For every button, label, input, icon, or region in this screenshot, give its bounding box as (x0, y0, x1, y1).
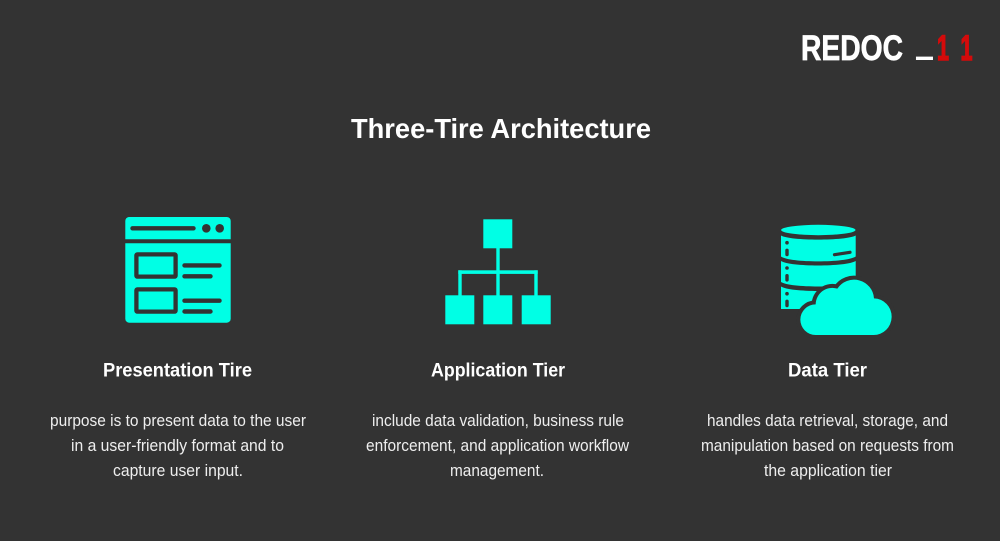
text block: presentation description: in a user-friendly format and to (71, 436, 284, 455)
panel: data tier (701, 225, 954, 480)
text block: application description: enforcement, and application workflow (366, 436, 630, 455)
text block: data description: the application tier (764, 461, 892, 480)
logo: REDOC _11: 1 (937, 28, 949, 68)
title: Three-Tire Architecture (351, 113, 651, 144)
logo: REDOC _11: _ (916, 22, 933, 62)
heading: application tier: Application Tier (431, 360, 565, 382)
panel: presentation tier (50, 217, 306, 480)
text block: presentation description (50, 411, 306, 480)
text block: application description: management. (450, 461, 544, 480)
icon: database with cloud (781, 225, 892, 335)
text block: presentation description: capture user input. (113, 461, 243, 480)
text block: application description (366, 411, 630, 480)
text block: data description (701, 411, 954, 480)
heading: data tier: Data Tier (788, 360, 867, 382)
panel: application tier (366, 219, 630, 480)
text block: application description: include data validation, business rule (372, 411, 624, 430)
text block: data description: manipulation based on requests from (701, 436, 954, 455)
text block: data description: handles data retrieval, storage, and (707, 411, 948, 430)
heading: presentation tire: Presentation Tire (103, 360, 252, 382)
logo: REDOC _11 (801, 22, 972, 68)
logo: REDOC _11: 1 (960, 28, 972, 68)
icon: hierarchy diagram (445, 219, 551, 324)
icon: browser window (125, 217, 231, 323)
text block: presentation description: purpose is to present data to the user (50, 411, 306, 430)
logo: REDOC _11: REDOC (801, 28, 903, 68)
